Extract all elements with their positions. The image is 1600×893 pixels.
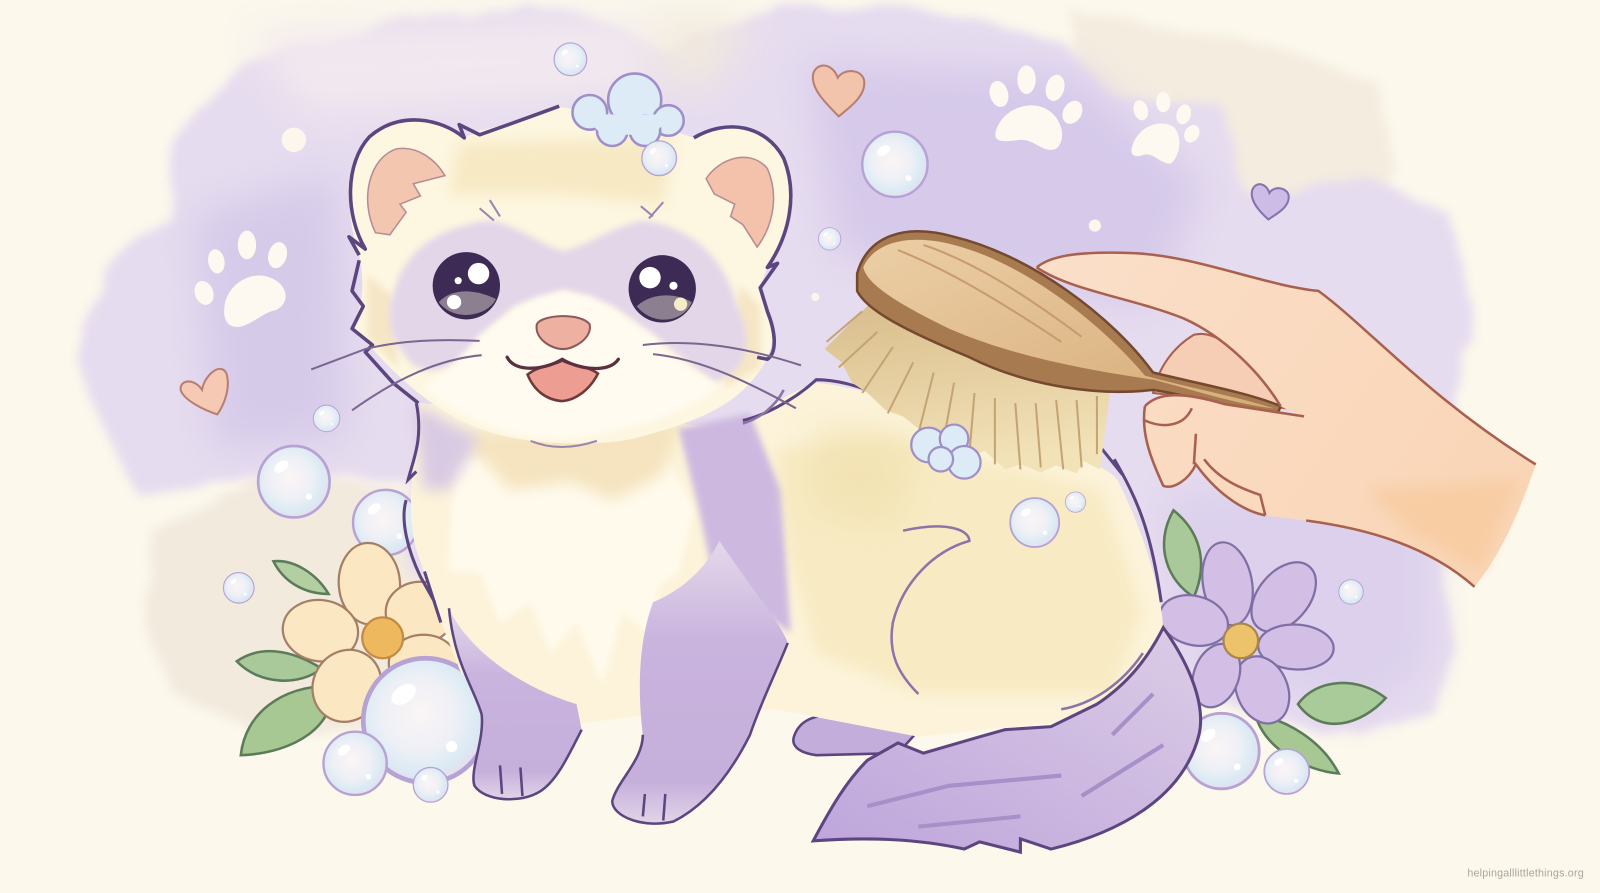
bubbles: right flower: [1184, 713, 1309, 794]
left front leg: [449, 608, 582, 799]
ferret: [311, 106, 1201, 852]
paw print: left: [191, 231, 290, 327]
leaves: left flower: [237, 561, 332, 755]
paw print: top large: [987, 65, 1087, 150]
brush head: [857, 231, 1281, 418]
lower fingers: [1144, 395, 1306, 520]
brush: [824, 231, 1281, 474]
face mask: [390, 220, 746, 383]
right front leg: [612, 541, 788, 824]
palm and index finger: [1037, 253, 1536, 587]
left eye: [433, 252, 500, 319]
bubbles behind ferret: [223, 43, 1363, 604]
purple flower: [1154, 538, 1335, 732]
watercolor wash: [73, 5, 1474, 740]
large bubble cluster: [323, 658, 488, 802]
bristles: [824, 304, 1110, 474]
mouth: [507, 357, 618, 401]
middle finger behind handle: [1153, 334, 1286, 408]
head: [311, 106, 801, 447]
watermark: helpingalllittlethings.org: [1467, 868, 1584, 880]
yellow flower: [279, 541, 458, 734]
back paw: [793, 715, 918, 755]
nose: [537, 316, 590, 349]
head outline: [349, 106, 791, 403]
soap foam on head: [572, 74, 684, 146]
heart: top peach: [813, 66, 864, 116]
white muzzle: [423, 291, 719, 439]
leaves: right flower: [1164, 510, 1386, 774]
bubble on head: [642, 141, 677, 176]
heart: right lavender: [1252, 184, 1289, 219]
tail: [813, 628, 1201, 852]
background dots: [282, 128, 1101, 301]
right ear inner: [706, 157, 774, 247]
hand: [1037, 253, 1536, 587]
left ear inner: [368, 148, 445, 235]
right eye: [629, 255, 696, 323]
body outline: [404, 380, 1161, 623]
heart: left peach: [181, 369, 228, 414]
bubbles on body: [1010, 492, 1086, 547]
body: [404, 380, 1163, 737]
paw print: top small: [1131, 92, 1203, 164]
foam on body: [911, 425, 981, 479]
whiskers: [311, 340, 801, 410]
